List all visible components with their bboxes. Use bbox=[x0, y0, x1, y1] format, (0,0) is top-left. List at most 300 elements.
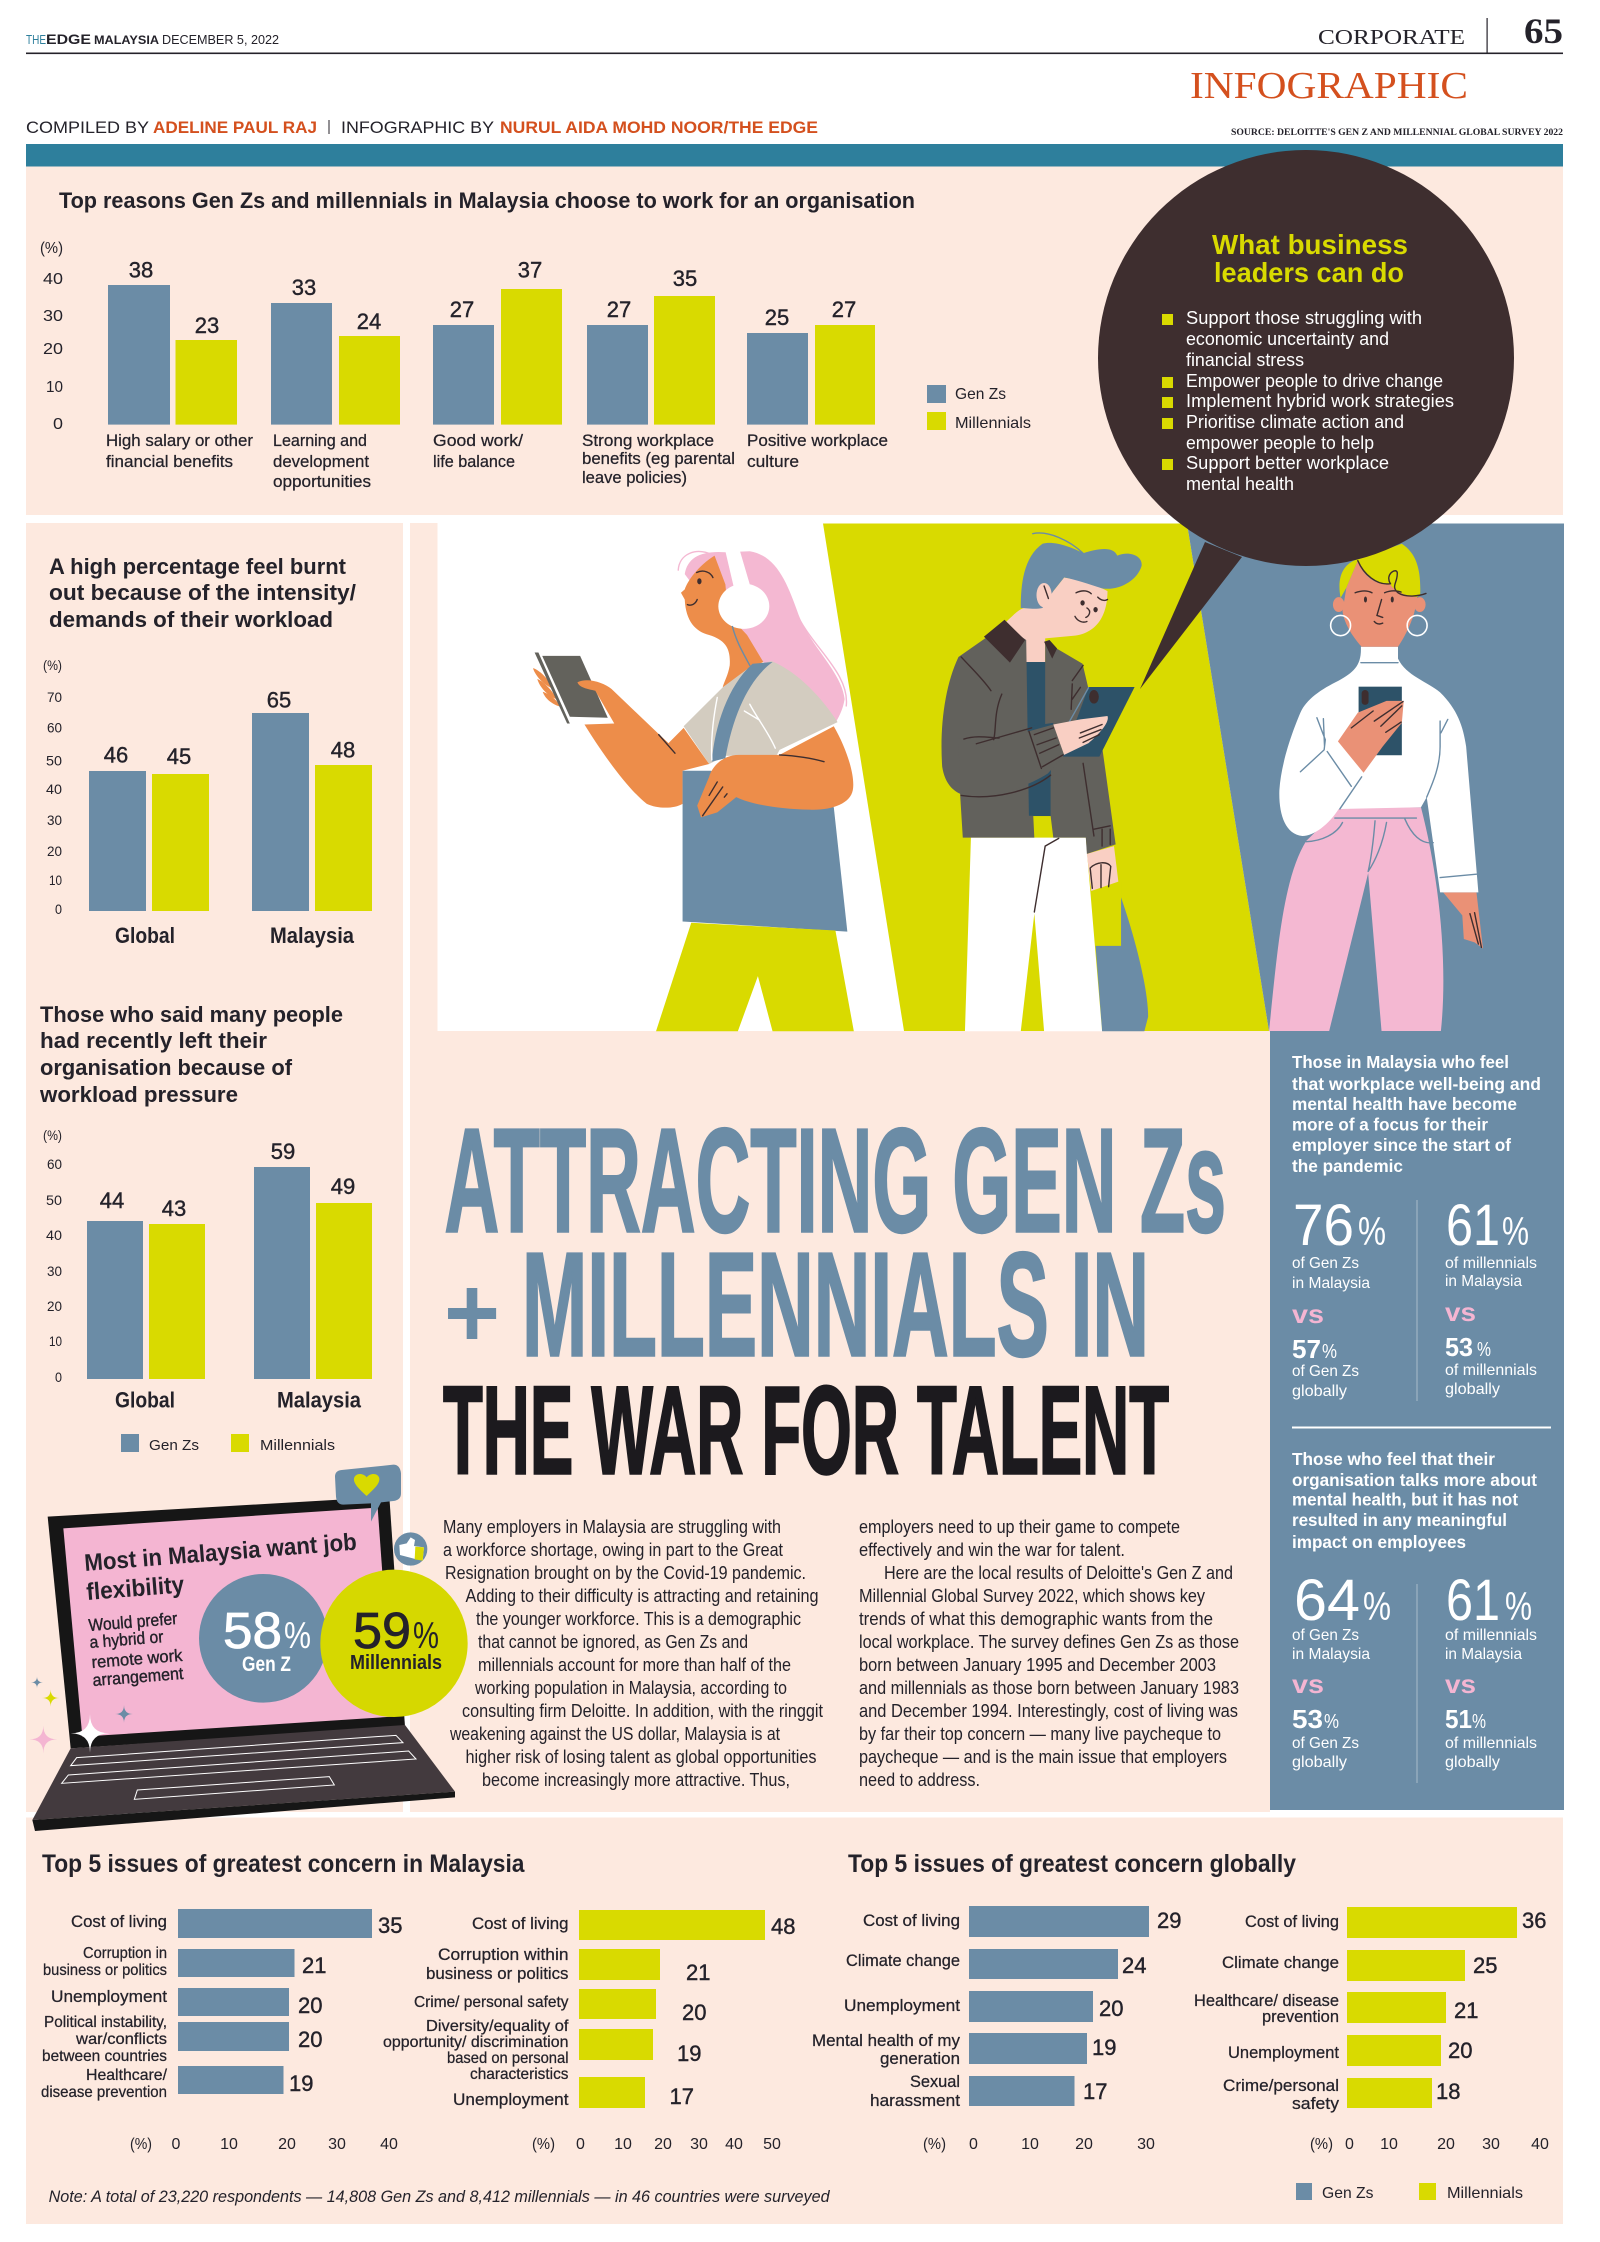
stat: millennials 61 vs 53: of millennials bbox=[1445, 1362, 1537, 1379]
callout bullets: Prioritise climate action and bbox=[1186, 412, 1404, 432]
article text: column 2: need to address. bbox=[859, 1770, 980, 1790]
bar chart: Malaysia Gen Zs bbox=[41, 1909, 402, 2153]
bar chart: Malaysia Gen Zs: 20 bbox=[278, 2136, 296, 2153]
newspaper header: EDGE bbox=[46, 31, 91, 47]
person: man with tablet bbox=[942, 533, 1148, 1031]
axis: 0 bbox=[55, 901, 62, 917]
stat: millennials 61 vs 51: 51 bbox=[1445, 1704, 1472, 1734]
bar chart: Malaysia millennials: 40 bbox=[725, 2136, 743, 2153]
article text: column 1: that cannot be ignored, as Gen Zs and bbox=[478, 1632, 748, 1652]
bar chart: global Gen Zs: 20 bbox=[1075, 2136, 1093, 2153]
article text: column 1: weakening against the US dollar, Malaysia is at bbox=[449, 1724, 780, 1744]
bar chart: global Gen Zs: generation bbox=[880, 2049, 960, 2068]
bar chart: Malaysia Gen Zs: Healthcare/ bbox=[86, 2067, 168, 2084]
text: Zs bbox=[1140, 1098, 1226, 1264]
article text: column 2: by far their top concern — many live paycheque to bbox=[859, 1724, 1221, 1744]
laptop body bbox=[29, 1465, 468, 1831]
stat: millennials 61 vs 53: in Malaysia bbox=[1445, 1273, 1522, 1290]
bar chart: global millennials: 20 bbox=[1437, 2136, 1455, 2153]
bar chart: Malaysia millennials: 0 bbox=[576, 2136, 585, 2153]
heading: mental health talk bbox=[1292, 1449, 1537, 1552]
callout heading: What business bbox=[1212, 229, 1408, 260]
y axis: 10 bbox=[46, 379, 63, 396]
newspaper header bbox=[26, 11, 1563, 54]
person: woman with hoops bbox=[1269, 544, 1483, 1031]
credits line: COMPILED BY bbox=[26, 118, 149, 137]
category labels: Learning and bbox=[273, 431, 367, 450]
stat: Gen Z 58%: Gen Z bbox=[242, 1653, 291, 1676]
stat: Gen Z 58%: % bbox=[284, 1615, 311, 1656]
bar chart: global Gen Zs: 20 bbox=[1099, 1996, 1123, 2021]
laptop subtext: Would prefer bbox=[88, 1609, 178, 1635]
stat: millennials 61 vs 51: % bbox=[1505, 1585, 1532, 1629]
bar chart: global Gen Zs: Cost of living bbox=[863, 1911, 960, 1930]
axis: 40 bbox=[46, 781, 62, 797]
bar chart: Malaysia millennials: 17 bbox=[670, 2084, 694, 2109]
bar chart: global millennials: prevention bbox=[1262, 2007, 1339, 2026]
bar chart: global millennials: 20 bbox=[1448, 2038, 1472, 2063]
bar chart: reasons: 37 bbox=[518, 258, 542, 282]
bar chart: Malaysia millennials bbox=[383, 1910, 795, 2153]
stat: Gen Zs 64 vs 53: of Gen Zs bbox=[1292, 1627, 1359, 1644]
bar chart: global Gen Zs: Unemployment bbox=[844, 1996, 960, 2015]
stat: Gen Zs 64 vs 53: % bbox=[1363, 1585, 1391, 1629]
bar chart: global Gen Zs: harassment bbox=[870, 2091, 960, 2110]
heading: mental health talk: impact on employees bbox=[1292, 1532, 1466, 1552]
note: Note: A total of 23,220 respondents — 14,808 Gen Zs and 8,412 millennials — in 46 countries were surveyed bbox=[49, 2187, 830, 2206]
bar chart: reasons: 23 bbox=[195, 313, 219, 338]
y axis: (%) bbox=[40, 240, 63, 257]
stat: Gen Zs 76 vs 57: 76 bbox=[1293, 1193, 1354, 1258]
bars: Global bbox=[115, 1388, 175, 1412]
panel: top reasons bbox=[26, 166, 1563, 515]
article text: column 1: Adding to their difficulty is attracting and retaining bbox=[466, 1586, 818, 1606]
bar chart: reasons bbox=[108, 258, 875, 425]
laptop heading bbox=[83, 1529, 358, 1606]
heading: workplace well-being: more of a focus for their bbox=[1292, 1114, 1488, 1134]
category labels: Strong workplace bbox=[582, 431, 714, 450]
article text: column 2: trends of what this demographic wants from the bbox=[859, 1609, 1213, 1629]
bar chart: global millennials: Crime/personal bbox=[1223, 2076, 1339, 2095]
main title bbox=[443, 1098, 1226, 1500]
bars: 45 bbox=[167, 744, 191, 769]
stat: Gen Zs 64 vs 53: in Malaysia bbox=[1292, 1646, 1370, 1663]
callout heading bbox=[1212, 229, 1408, 288]
stat: millennials 61 vs 51: vs bbox=[1445, 1669, 1476, 1699]
bar chart: global Gen Zs: 17 bbox=[1083, 2079, 1107, 2104]
axis: 20 bbox=[47, 1298, 62, 1314]
bar chart: Malaysia Gen Zs: between countries bbox=[42, 2048, 167, 2065]
stat: Gen Zs 76 vs 57: % bbox=[1322, 1341, 1337, 1363]
callout bullets bbox=[1162, 308, 1454, 494]
chart: burnt out bbox=[43, 554, 372, 948]
bar chart: global Gen Zs: 19 bbox=[1092, 2035, 1116, 2060]
bar chart: global millennials: (%) bbox=[1310, 2136, 1333, 2153]
article text: column 2: employers need to up their game to compete bbox=[859, 1517, 1180, 1537]
article text: column 2 bbox=[859, 1517, 1239, 1790]
bar chart: global Gen Zs: 0 bbox=[969, 2136, 978, 2153]
article text: column 2: Millennial Global Survey 2022, which shows key bbox=[859, 1586, 1205, 1606]
bar chart: global millennials: 36 bbox=[1522, 1908, 1546, 1933]
axis: 10 bbox=[49, 1333, 62, 1349]
y axis: 30 bbox=[43, 308, 63, 325]
stat: Gen Z 58% bbox=[223, 1602, 311, 1676]
bar chart: global Gen Zs: 29 bbox=[1157, 1908, 1181, 1933]
laptop heading: Most in Malaysia want job bbox=[83, 1529, 358, 1577]
bar chart: Malaysia Gen Zs: 0 bbox=[172, 2136, 181, 2153]
bar chart: global Gen Zs: (%) bbox=[923, 2136, 946, 2153]
bar chart: Malaysia millennials: (%) bbox=[532, 2136, 555, 2153]
teal banner bbox=[26, 144, 1563, 166]
bar chart: Malaysia millennials: 20 bbox=[682, 2000, 706, 2025]
stat: millennials 59%: 59 bbox=[353, 1602, 411, 1659]
article text: column 1: a workforce shortage, owing in part to the Great bbox=[443, 1540, 783, 1560]
bar chart: Malaysia millennials: 20 bbox=[654, 2136, 672, 2153]
heading: burnt out: A high percentage feel burnt bbox=[49, 554, 347, 579]
panel: centre article bbox=[410, 523, 1270, 1812]
bar chart: reasons: 27 bbox=[450, 297, 474, 322]
bar chart: Malaysia millennials: Diversity/equality of bbox=[426, 2018, 569, 2035]
credits line: NURUL AIDA MOHD NOOR/THE EDGE bbox=[500, 118, 818, 137]
bar chart: Malaysia millennials: based on personal bbox=[447, 2050, 568, 2067]
bar chart: Malaysia millennials: Unemployment bbox=[453, 2090, 569, 2109]
bar chart: Malaysia Gen Zs: 40 bbox=[380, 2136, 398, 2153]
category labels: culture bbox=[747, 452, 799, 471]
bars: 48 bbox=[331, 738, 355, 762]
article text: column 1: the younger workforce. This is a demographic bbox=[476, 1609, 801, 1629]
heading: workplace well-being: employer since the start of bbox=[1292, 1135, 1511, 1155]
bar chart: global Gen Zs: 10 bbox=[1021, 2136, 1039, 2153]
stat: millennials 61 vs 51 bbox=[1445, 1568, 1537, 1771]
bar chart: Malaysia Gen Zs: 20 bbox=[298, 1993, 322, 2018]
bar chart: global millennials: 0 bbox=[1345, 2136, 1354, 2153]
callout bullets: Support better workplace bbox=[1186, 453, 1389, 473]
bar chart: Malaysia Gen Zs: war/conflicts bbox=[75, 2031, 167, 2048]
stat: Gen Zs 64 vs 53: 64 bbox=[1294, 1568, 1360, 1633]
main title: + bbox=[444, 1257, 500, 1369]
heading: workplace well-being bbox=[1292, 1052, 1541, 1176]
chart: left organisation bbox=[39, 1002, 372, 1454]
stat: millennials 61 vs 53 bbox=[1445, 1193, 1537, 1398]
bar chart: Malaysia Gen Zs: 21 bbox=[302, 1953, 326, 1978]
axis: 20 bbox=[47, 843, 62, 859]
bar chart: Malaysia millennials: 50 bbox=[763, 2136, 781, 2153]
article text: column 2: Here are the local results of Deloitte's Gen Z and bbox=[884, 1563, 1233, 1583]
category labels: financial benefits bbox=[106, 452, 233, 471]
legend: Gen Zs bbox=[955, 386, 1006, 403]
y axis: 20 bbox=[43, 341, 63, 358]
axis: 30 bbox=[47, 1263, 62, 1279]
callout bullets: mental health bbox=[1186, 474, 1294, 494]
bar chart: global millennials: Unemployment bbox=[1228, 2043, 1339, 2062]
bars: 59 bbox=[271, 1139, 295, 1164]
stat: millennials 61 vs 53: 61 bbox=[1446, 1193, 1500, 1258]
heading: workload pressure: organisation because of bbox=[40, 1055, 293, 1080]
stat: millennials 61 vs 53: vs bbox=[1445, 1297, 1476, 1327]
laptop heading: flexibility bbox=[85, 1571, 186, 1606]
bar chart: global Gen Zs: 24 bbox=[1122, 1953, 1146, 1978]
category labels: benefits (eg parental bbox=[582, 449, 735, 468]
credits line: ADELINE PAUL RAJ bbox=[153, 118, 317, 137]
stat: millennials 61 vs 51: of millennials bbox=[1445, 1735, 1537, 1752]
stat: Gen Zs 76 vs 57: in Malaysia bbox=[1292, 1275, 1370, 1292]
bar chart: Malaysia millennials: 10 bbox=[614, 2136, 632, 2153]
legend: Millennials bbox=[1447, 2185, 1523, 2202]
bar chart: Malaysia Gen Zs: 20 bbox=[298, 2027, 322, 2052]
stat: Gen Zs 64 vs 53: 53 bbox=[1292, 1704, 1323, 1734]
heading: workplace well-being: that workplace well-being and bbox=[1292, 1074, 1541, 1094]
heading: burnt out bbox=[49, 554, 356, 632]
newspaper header: MALAYSIA bbox=[94, 33, 159, 47]
heading: mental health talk: organisation talks more about bbox=[1292, 1470, 1537, 1490]
stat: Gen Zs 64 vs 53: of Gen Zs bbox=[1292, 1735, 1359, 1752]
laptop subtext: arrangement bbox=[92, 1664, 184, 1690]
credits line bbox=[26, 118, 818, 137]
panel: blue statistics bbox=[1270, 1031, 1564, 1810]
stat: millennials 61 vs 51: 61 bbox=[1446, 1568, 1500, 1633]
bar chart: global Gen Zs: Climate change bbox=[846, 1951, 960, 1970]
article text: column 2: effectively and win the war for talent. bbox=[859, 1540, 1125, 1560]
stat: Gen Zs 64 vs 53: globally bbox=[1292, 1754, 1347, 1771]
heading: workload pressure: had recently left their bbox=[40, 1028, 267, 1053]
heading: mental health talk: Those who feel that their bbox=[1292, 1449, 1495, 1469]
article text: column 1: millennials account for more than half of the bbox=[478, 1655, 791, 1675]
bar chart: reasons: 24 bbox=[357, 309, 381, 334]
legend: Gen Zs bbox=[149, 1437, 199, 1454]
bar chart: global Gen Zs: Sexual bbox=[910, 2072, 960, 2091]
article text: column 2: paycheque — and is the main issue that employers bbox=[859, 1747, 1227, 1767]
laptop subtext: remote work bbox=[91, 1646, 184, 1672]
heading: mental health talk: resulted in any meaningful bbox=[1292, 1510, 1507, 1530]
callout bullets: financial stress bbox=[1186, 350, 1304, 370]
bar chart: Malaysia millennials: 21 bbox=[686, 1960, 710, 1985]
bar chart: Malaysia millennials: opportunity/ discrimination bbox=[383, 2034, 568, 2051]
stat: millennials 61 vs 53: 53 bbox=[1445, 1332, 1473, 1362]
heading: burnt out: demands of their workload bbox=[49, 607, 333, 632]
axis: 40 bbox=[46, 1227, 62, 1243]
axis: 10 bbox=[49, 872, 62, 888]
callout bullets: Implement hybrid work strategies bbox=[1186, 391, 1454, 411]
callout bullets: economic uncertainty and bbox=[1186, 329, 1389, 349]
axis: 60 bbox=[47, 720, 62, 736]
stat: Gen Zs 64 vs 53 bbox=[1292, 1568, 1391, 1771]
bar chart: global millennials: Healthcare/ disease bbox=[1194, 1991, 1339, 2010]
bar chart: global millennials: 30 bbox=[1482, 2136, 1500, 2153]
heading: mental health talk: mental health, but it has not bbox=[1292, 1490, 1518, 1510]
stat: millennials 61 vs 53: globally bbox=[1445, 1381, 1500, 1398]
bar chart: reasons: 27 bbox=[607, 297, 631, 322]
stat: Gen Zs 76 vs 57: 57 bbox=[1292, 1334, 1321, 1364]
article text: column 1: Resignation brought on by the Covid-19 pandemic. bbox=[445, 1563, 806, 1583]
bar chart: global Gen Zs bbox=[812, 1906, 1181, 2153]
panel: bottom issues bbox=[26, 1818, 1563, 2224]
stat: millennials 59% bbox=[350, 1602, 442, 1674]
bar chart: global millennials bbox=[1194, 1907, 1549, 2153]
legend: Millennials bbox=[955, 415, 1031, 432]
axis: 30 bbox=[47, 812, 62, 828]
bars: Malaysia bbox=[277, 1388, 362, 1412]
axis: 70 bbox=[47, 689, 62, 705]
heading: global issues: Top 5 issues of greatest concern globally bbox=[848, 1850, 1296, 1878]
bar chart: global millennials: safety bbox=[1292, 2094, 1340, 2113]
article text: column 1: Many employers in Malaysia are struggling with bbox=[443, 1517, 781, 1537]
bars bbox=[89, 688, 372, 948]
heading: Malaysia issues: Top 5 issues of greatest concern in Malaysia bbox=[42, 1850, 525, 1878]
bars: 49 bbox=[331, 1174, 355, 1199]
stat: Gen Zs 64 vs 53: vs bbox=[1292, 1669, 1324, 1699]
heading: top reasons: Top reasons Gen Zs and millennials in Malaysia choose to work for an organisation bbox=[59, 188, 915, 213]
bar chart: Malaysia Gen Zs: 30 bbox=[328, 2136, 346, 2153]
stat: millennials 61 vs 51: % bbox=[1472, 1711, 1486, 1733]
axis: 0 bbox=[55, 1369, 62, 1385]
bar chart: reasons: 35 bbox=[673, 266, 697, 291]
article text: column 2: born between January 1995 and December 2003 bbox=[859, 1655, 1216, 1675]
bar chart: global Gen Zs: Mental health of my bbox=[812, 2031, 960, 2050]
article text: column 1: consulting firm Deloitte. In addition, with the ringgit bbox=[462, 1701, 823, 1721]
laptop subtext bbox=[88, 1609, 184, 1690]
bars: 65 bbox=[267, 688, 291, 712]
category labels: Positive workplace bbox=[747, 431, 888, 450]
axis bbox=[43, 1127, 62, 1385]
article text: column 2: and December 1994. Interestingly, cost of living was bbox=[859, 1701, 1238, 1721]
bar chart: global Gen Zs: 30 bbox=[1137, 2136, 1155, 2153]
legend bbox=[1296, 2183, 1523, 2202]
bar chart: Malaysia Gen Zs: Corruption in bbox=[83, 1945, 167, 1962]
laptop subtext: a hybrid or bbox=[89, 1627, 164, 1652]
axis: (%) bbox=[43, 657, 62, 673]
stat: Gen Zs 76 vs 57: % bbox=[1358, 1210, 1386, 1254]
y axis: 0 bbox=[53, 416, 63, 433]
axis: 50 bbox=[46, 752, 62, 768]
bars: 43 bbox=[162, 1196, 186, 1221]
bars: Global bbox=[115, 923, 175, 948]
bars: 46 bbox=[104, 742, 128, 768]
source line: SOURCE: DELOITTE'S GEN Z AND MILLENNIAL GLOBAL SURVEY 2022 bbox=[1231, 128, 1563, 138]
bars bbox=[87, 1139, 372, 1412]
axis: 60 bbox=[47, 1156, 62, 1172]
stat: millennials 61 vs 51: globally bbox=[1445, 1754, 1500, 1771]
bar chart: Malaysia Gen Zs: Unemployment bbox=[51, 1987, 167, 2006]
newspaper header: DECEMBER 5, 2022 bbox=[162, 32, 279, 47]
article text: column 1: working population in Malaysia, according to bbox=[474, 1678, 787, 1698]
stat: millennials 61 vs 53: % bbox=[1502, 1210, 1529, 1254]
stat: Gen Zs 76 vs 57: globally bbox=[1292, 1383, 1347, 1400]
callout bullets: empower people to help bbox=[1186, 433, 1374, 453]
panel: left charts bbox=[26, 523, 403, 1812]
category labels: opportunities bbox=[273, 472, 371, 491]
stat: Gen Z 58%: 58 bbox=[223, 1602, 282, 1659]
category labels bbox=[106, 431, 888, 491]
stat: Gen Zs 76 vs 57 bbox=[1292, 1193, 1386, 1400]
bar chart: reasons: 27 bbox=[832, 297, 856, 322]
y axis: 40 bbox=[43, 271, 63, 288]
category labels: development bbox=[273, 452, 369, 471]
bar chart: global millennials: Climate change bbox=[1222, 1953, 1339, 1972]
bar chart: Malaysia Gen Zs: Cost of living bbox=[71, 1912, 167, 1931]
bar chart: Malaysia millennials: characteristics bbox=[470, 2066, 568, 2083]
legend: Gen Zs bbox=[1322, 2185, 1374, 2202]
bar chart: reasons: 33 bbox=[292, 275, 316, 300]
bar chart: Malaysia millennials: Cost of living bbox=[472, 1914, 568, 1933]
stat: millennials 61 vs 51: in Malaysia bbox=[1445, 1646, 1522, 1663]
newspaper header: THE bbox=[26, 32, 46, 47]
bars: 44 bbox=[100, 1188, 124, 1213]
article text: column 2: and millennials as those born between January 1983 bbox=[859, 1678, 1239, 1698]
stat: millennials 59%: Millennials bbox=[350, 1652, 442, 1674]
callout heading: leaders can do bbox=[1214, 257, 1404, 288]
credits line: INFOGRAPHIC BY bbox=[341, 118, 494, 137]
section label: infographic: INFOGRAPHIC bbox=[1190, 65, 1468, 107]
stat: Gen Zs 76 vs 57: of Gen Zs bbox=[1292, 1363, 1359, 1380]
axis bbox=[43, 657, 62, 917]
legend: Millennials bbox=[260, 1437, 335, 1454]
person: woman with headphones bbox=[533, 551, 854, 1031]
heading: workload pressure bbox=[39, 1002, 343, 1107]
bar chart: Malaysia millennials: Corruption within bbox=[438, 1945, 568, 1964]
article text: column 1: higher risk of losing talent as global opportunities bbox=[466, 1747, 816, 1767]
heading: workload pressure: workload pressure bbox=[39, 1082, 238, 1107]
article text: column 1: become increasingly more attractive. Thus, bbox=[482, 1770, 790, 1790]
category labels: Good work/ bbox=[433, 431, 523, 450]
bars: Malaysia bbox=[270, 923, 355, 948]
heading: workload pressure: Those who said many people bbox=[40, 1002, 343, 1027]
bar chart: Malaysia millennials: 19 bbox=[677, 2041, 701, 2066]
callout bubble: what business leaders can do bbox=[1098, 150, 1514, 689]
heading: workplace well-being: mental health have become bbox=[1292, 1094, 1517, 1114]
bar chart: Malaysia Gen Zs: business or politics bbox=[43, 1962, 167, 1979]
bar chart: Malaysia Gen Zs: 35 bbox=[378, 1913, 402, 1938]
fingers behind phone bbox=[533, 668, 560, 707]
stat: millennials 61 vs 51: of millennials bbox=[1445, 1627, 1537, 1644]
stat: Gen Zs 76 vs 57: of Gen Zs bbox=[1292, 1255, 1359, 1272]
bar chart: global millennials: 10 bbox=[1380, 2136, 1398, 2153]
bar chart: global millennials: Cost of living bbox=[1245, 1912, 1339, 1931]
laptop illustration: job flexibility bbox=[29, 1465, 468, 1831]
newspaper header: CORPORATE bbox=[1318, 25, 1465, 49]
article text: column 2: local workplace. The survey defines Gen Zs as those bbox=[859, 1632, 1239, 1652]
callout bullets: Empower people to drive change bbox=[1186, 371, 1443, 391]
bar chart: Malaysia Gen Zs: Political instability, bbox=[44, 2014, 167, 2031]
stat: Gen Zs 64 vs 53: % bbox=[1324, 1711, 1339, 1733]
bar chart: Malaysia Gen Zs: 10 bbox=[220, 2136, 238, 2153]
category labels: life balance bbox=[433, 452, 515, 471]
heading: workplace well-being: Those in Malaysia who feel bbox=[1292, 1052, 1509, 1072]
bar chart: reasons: 38 bbox=[129, 258, 153, 282]
bar chart: reasons: 25 bbox=[765, 305, 789, 330]
bar chart: Malaysia Gen Zs: 19 bbox=[289, 2071, 313, 2096]
legend bbox=[121, 1434, 335, 1454]
category labels: leave policies) bbox=[582, 468, 687, 487]
bar chart: Malaysia Gen Zs: (%) bbox=[130, 2136, 152, 2153]
stat: millennials 59%: % bbox=[413, 1615, 439, 1656]
article text: column 1 bbox=[443, 1517, 823, 1790]
stat: millennials 61 vs 53: of millennials bbox=[1445, 1255, 1537, 1272]
axis: (%) bbox=[43, 1127, 62, 1143]
callout bullets: Support those struggling with bbox=[1186, 308, 1422, 328]
illustration: three people on phones bbox=[438, 515, 1564, 1031]
heading: workplace well-being: the pandemic bbox=[1292, 1156, 1403, 1176]
bar chart: global millennials: 21 bbox=[1454, 1998, 1478, 2023]
legend bbox=[927, 385, 1031, 432]
bar chart: Malaysia millennials: Crime/ personal safety bbox=[414, 1994, 568, 2011]
stat: millennials 61 vs 53: % bbox=[1477, 1339, 1491, 1361]
y axis bbox=[40, 240, 63, 433]
bar chart: Malaysia Gen Zs: disease prevention bbox=[41, 2084, 167, 2101]
stat: Gen Zs 76 vs 57: vs bbox=[1292, 1299, 1324, 1329]
bar chart: Malaysia millennials: 48 bbox=[771, 1914, 795, 1939]
heading: burnt out: out because of the intensity/ bbox=[49, 580, 356, 605]
category labels: High salary or other bbox=[106, 431, 253, 450]
